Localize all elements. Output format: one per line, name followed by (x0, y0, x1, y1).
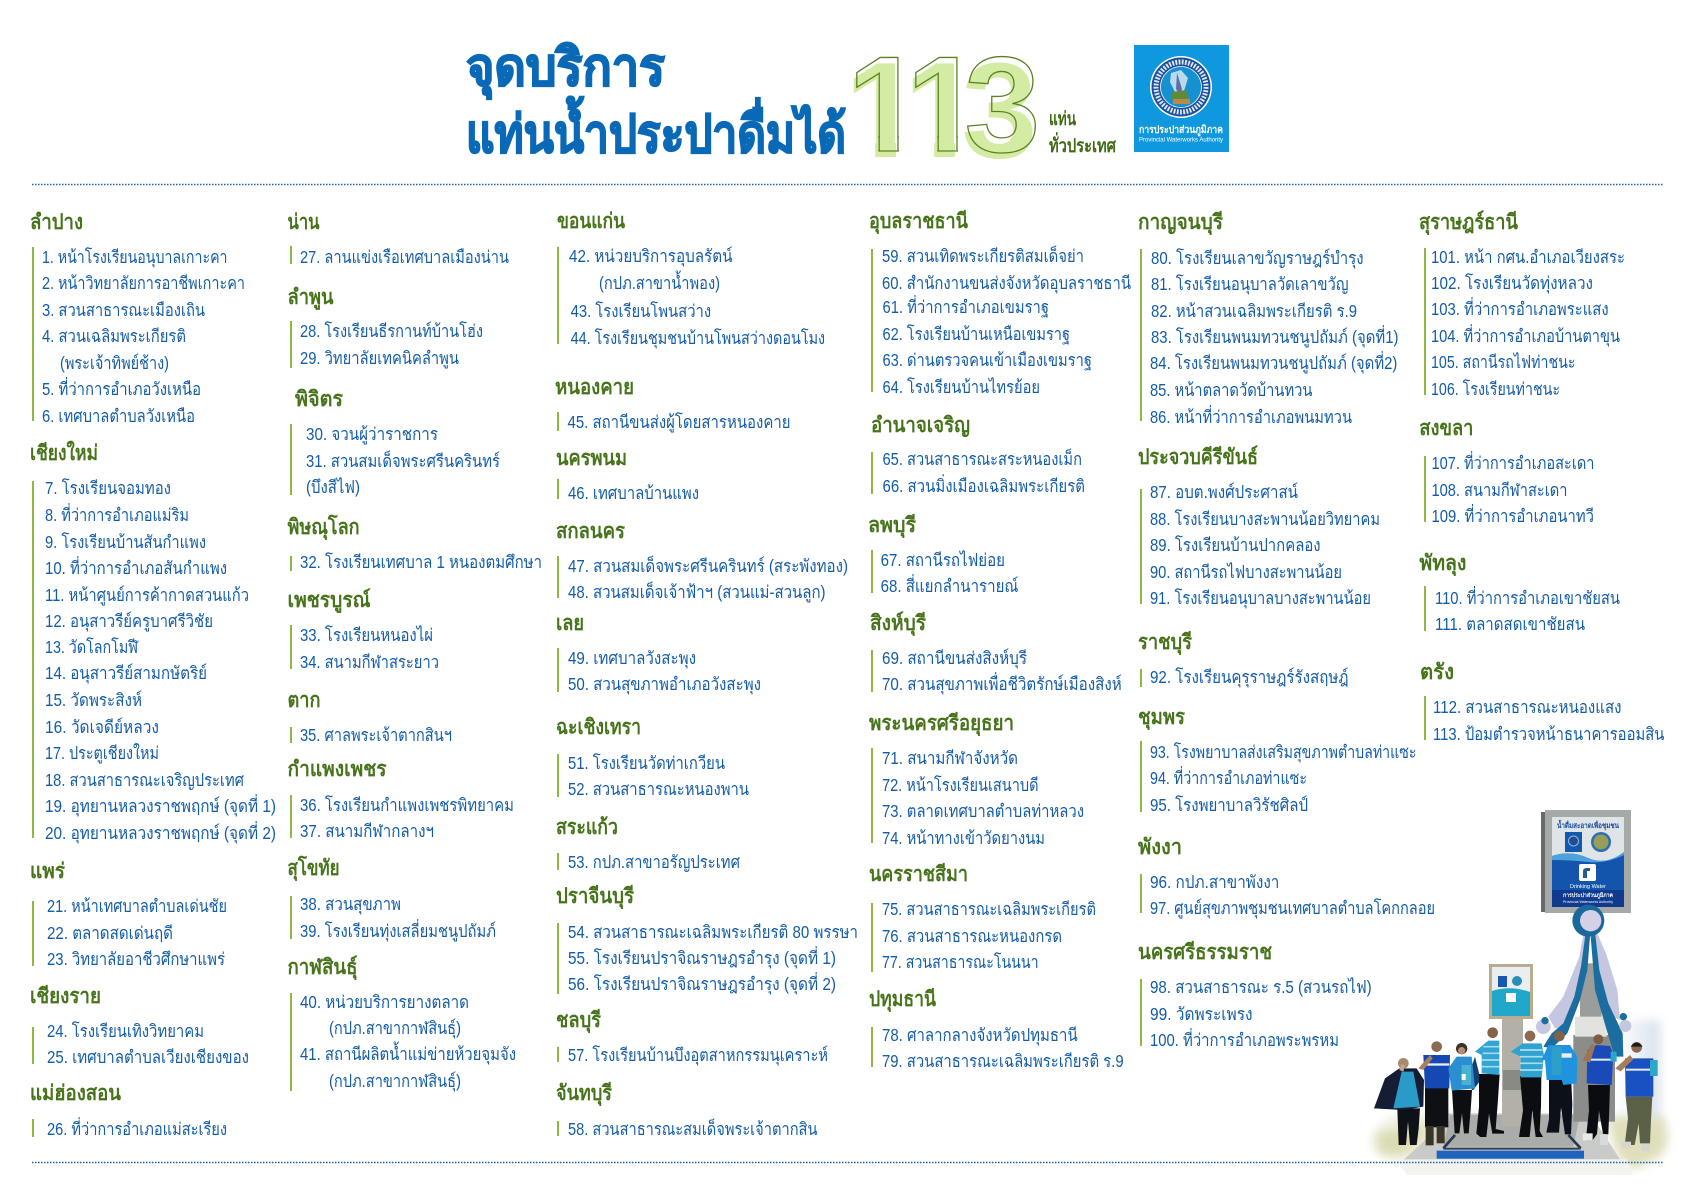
panel: สระแก้ว (556, 815, 740, 872)
list: กาญจนบุรี: 86. หน้าที่ว่าการอำเภอพนมทวน (1150, 405, 1352, 427)
heading: แพร่: แพร่ (30, 860, 66, 883)
list: แพร่ (47, 896, 227, 969)
list: ลำปาง: 2. หน้าวิทยาลัยการอาชีพเกาะคา (42, 273, 245, 293)
list: ประจวบคีรีขันธ์: 88. โรงเรียนบางสะพานน้อยวิทยาคม (1150, 509, 1380, 529)
list: แพร่: 22. ตลาดสดเด่นฤดี (47, 923, 173, 943)
panel: พระนครศรีอยุธยา (869, 711, 1084, 848)
panel: กาฬสินธุ์ (288, 955, 516, 1092)
person 2 (1418, 1041, 1450, 1145)
list: ขอนแก่น: 42. หน่วยบริการอุบลรัตน์ (569, 246, 733, 267)
heading: พิษณุโลก: พิษณุโลก (288, 514, 360, 541)
panel: หนองคาย (555, 376, 790, 433)
heading: ตาก: ตาก (288, 689, 320, 712)
list: ลำพูน: 29. วิทยาลัยเทคนิคลำพูน (300, 348, 459, 369)
list: อุบลราชธานี (882, 245, 1131, 397)
panel: ราชบุรี (1138, 630, 1348, 688)
list: อุบลราชธานี: 63. ด่านตรวจคนเข้าเมืองเขมราฐ (882, 350, 1092, 371)
list: นครราชสีมา (882, 899, 1096, 972)
list: กำแพงเพชร (300, 795, 514, 841)
list: สุราษฎร์ธานี: 101. หน้า กศน.อำเภอเวียงสระ (1431, 247, 1625, 267)
panel: พังงา (1138, 836, 1435, 919)
list: อำนาจเจริญ: 65. สวนสาธารณะสระหนองเม็ก (882, 448, 1082, 469)
list: ปทุมธานี: 79. สวนสาธารณะเฉลิมพระเกียรติ ร.9 (882, 1051, 1124, 1071)
list: กาญจนบุรี: 85. หน้าตลาดวัดบ้านทวน (1150, 380, 1313, 400)
heading: ชุมพร: ชุมพร (1138, 706, 1186, 731)
heading: เพชรบูรณ์: เพชรบูรณ์ (288, 588, 371, 614)
panel: ประจวบคีรีขันธ์ (1138, 445, 1380, 609)
list: อุบลราชธานี: 59. สวนเทิดพระเกียรติสมเด็จย่า (882, 245, 1084, 266)
heading: พระนครศรีอยุธยา: พระนครศรีอยุธยา (869, 711, 1014, 737)
list: ปราจีนบุรี: 56. โรงเรียนปราจิณราษฎรอำรุง (จุดที่ 2) (568, 972, 836, 995)
list: ลำปาง: (พระเจ้าทิพย์ช้าง) (60, 353, 169, 373)
logo: Provincial Waterworks Authority: การประปาส่วนภูมิภาค (1139, 124, 1223, 137)
list: นครราชสีมา: 75. สวนสาธารณะเฉลิมพระเกียรติ (882, 899, 1096, 919)
list: กำแพงเพชร: 36. โรงเรียนกำแพงเพชรพิทยาคม (300, 795, 514, 815)
list: กำแพงเพชร: 37. สนามกีฬากลางฯ (300, 821, 434, 841)
heading: เลย: เลย (556, 612, 584, 635)
list: หนองคาย: 45. สถานีขนส่งผู้โดยสารหนองคาย (568, 412, 790, 433)
list: พระนครศรีอยุธยา: 72. หน้าโรงเรียนเสนาบดี (882, 775, 1039, 795)
drape, rosette and dispenser cabinet (1536, 905, 1631, 1122)
list: อุบลราชธานี: 60. สำนักงานขนส่งจังหวัดอุบลราชธานี (882, 273, 1131, 294)
panel: ตรัง (1420, 661, 1664, 744)
list: สุราษฎร์ธานี: 104. ที่ว่าการอำเภอบ้านตาขุน (1431, 324, 1620, 347)
subtitle: units nationwide (1049, 109, 1117, 157)
list: ลำพูน (300, 321, 483, 369)
list: เพชรบูรณ์: 34. สนามกีฬาสระยาว (300, 652, 439, 672)
list: ลพบุรี: 68. สี่แยกลำนารายณ์ (881, 574, 1018, 596)
list: กาญจนบุรี: 81. โรงเรียนอนุบาลวัดเลาขวัญ (1151, 274, 1348, 295)
list: สุราษฎร์ธานี: 105. สถานีรถไฟท่าชนะ (1431, 352, 1576, 372)
list: เชียงใหม่: 10. ที่ว่าการอำเภอสันกำแพง (45, 556, 227, 578)
heading: หนองคาย: หนองคาย (555, 376, 634, 399)
list: เลย (568, 648, 761, 695)
panel: กำแพงเพชร (288, 758, 514, 841)
list: พิษณุโลก: 32. โรงเรียนเทศบาล 1 หนองตมศึกษา (300, 552, 542, 572)
heading: จันทบุรี: จันทบุรี (556, 1081, 613, 1107)
panel: จันทบุรี (556, 1081, 818, 1139)
heading: กาฬสินธุ์: กาฬสินธุ์ (288, 955, 358, 981)
list: กาฬสินธุ์: (กปภ.สาขากาฬสินธุ์) (329, 1018, 461, 1039)
list: พัทลุง: 111. ตลาดสดเขาชัยสน (1435, 614, 1585, 634)
panel: กาญจนบุรี (1138, 210, 1398, 427)
list: สุโขทัย: 39. โรงเรียนทุ่งเสลี่ยมชนูปถัมภ์ (300, 919, 496, 942)
list: ราชบุรี: 92. โรงเรียนคุรุราษฎร์รังสฤษฎ์ (1150, 667, 1348, 688)
panel: เพชรบูรณ์ (288, 588, 439, 672)
panel: สกลนคร (556, 520, 848, 603)
list: ลำปาง: 5. ที่ว่าการอำเภอวังเหนือ (42, 377, 201, 399)
list: ชลบุรี: 57. โรงเรียนบ้านบึงอุตสาหกรรมนุเคราะห์ (568, 1045, 828, 1066)
list: ลำปาง: 6. เทศบาลตำบลวังเหนือ (42, 406, 195, 426)
list: เชียงใหม่ (45, 478, 276, 844)
heading: กาญจนบุรี: กาญจนบุรี (1138, 210, 1224, 236)
list: สระแก้ว: 53. กปภ.สาขาอรัญประเทศ (568, 852, 740, 872)
list: เพชรบูรณ์ (300, 625, 439, 672)
heading: ขอนแก่น: ขอนแก่น (557, 210, 626, 233)
list: ตาก: 35. ศาลพระเจ้าตากสินฯ (300, 725, 452, 745)
heading: สระแก้ว: สระแก้ว (556, 815, 618, 839)
big sign panel: การประปาส่วนภูมิภาค (1563, 891, 1613, 900)
panel: นครศรีธรรมราช (1138, 940, 1372, 1050)
list: นครราชสีมา: 77. สวนสาธารณะโนนนา (882, 952, 1039, 972)
list: สุราษฎร์ธานี (1431, 247, 1625, 399)
list: ชุมพร (1150, 742, 1416, 815)
panel: พิจิตร (290, 388, 500, 497)
list: นครศรีธรรมราช: 99. วัดพระเพรง (1150, 1004, 1253, 1024)
list: อุบลราชธานี: 62. โรงเรียนบ้านเหนือเขมราฐ (882, 324, 1070, 345)
heading: สุโขทัย: สุโขทัย (288, 855, 340, 882)
heading: สิงห์บุรี: สิงห์บุรี (870, 611, 927, 637)
list: ชุมพร: 93. โรงพยาบาลส่งเสริมสุขภาพตำบลท่าแซะ (1150, 742, 1416, 763)
person 6 (1542, 1031, 1577, 1134)
list: กาญจนบุรี: 82. หน้าสวนเฉลิมพระเกียรติ ร.9 (1151, 301, 1357, 321)
heading: อุบลราชธานี: อุบลราชธานี (869, 209, 969, 235)
list: ลำปาง: 1. หน้าโรงเรียนอนุบาลเกาะคา (42, 247, 228, 268)
list: เชียงใหม่: 12. อนุสาวรีย์ครูบาศรีวิชัย (45, 611, 213, 632)
small sign and post (1489, 964, 1533, 1126)
person 8 (1615, 1042, 1658, 1151)
title: แท่นน้ำประปาดื่มได้ (466, 96, 846, 164)
list: สงขลา: 109. ที่ว่าการอำเภอนาทวี (1432, 504, 1594, 526)
panel: ขอนแก่น (557, 210, 825, 349)
list: สุโขทัย (300, 894, 496, 942)
panel: สุโขทัย (288, 855, 496, 942)
photo: officials drinking at water station (1370, 810, 1668, 1175)
photo background and ground (1370, 1020, 1668, 1175)
list: ปทุมธานี (882, 1025, 1124, 1071)
list: ชุมพร: 94. ที่ว่าการอำเภอท่าแซะ (1150, 766, 1307, 788)
list: สงขลา: 108. สนามกีฬาสะเดา (1432, 480, 1568, 500)
list: กาฬสินธุ์: 41. สถานีผลิตน้ำแม่ข่ายห้วยจุมจัง (300, 1041, 516, 1065)
list: เชียงราย: 24. โรงเรียนเทิงวิทยาคม (47, 1021, 204, 1041)
list: พิจิตร: 31. สวนสมเด็จพระศรีนครินทร์ (306, 450, 500, 471)
person 5 (1511, 1031, 1544, 1137)
list: ลำปาง: 4. สวนเฉลิมพระเกียรติ (42, 326, 186, 346)
panel: น่าน (288, 211, 509, 267)
list: เชียงใหม่: 13. วัดโลกโมฬี (45, 637, 139, 657)
list: พัทลุง (1435, 586, 1620, 634)
big number 113: 1 (906, 28, 982, 180)
list: พังงา: 96. กปภ.สาขาพังงา (1150, 872, 1279, 892)
list: สกลนคร: 48. สวนสมเด็จเจ้าฟ้าฯ (สวนแม่-สวนลูก) (568, 581, 826, 603)
list: ฉะเชิงเทรา (568, 753, 749, 799)
list: สิงห์บุรี: 70. สวนสุขภาพเพื่อชีวิตรักษ์เมืองสิงห์ (882, 672, 1122, 695)
title: จุดบริการ (466, 39, 665, 100)
list: กาฬสินธุ์: 40. หน่วยบริการยางตลาด (300, 992, 469, 1012)
panel: นครพนม (556, 447, 699, 503)
big number 113: 1 (844, 34, 920, 186)
heading: เชียงใหม่: เชียงใหม่ (30, 440, 98, 465)
title (466, 39, 846, 164)
panel: แม่ฮ่องสอน (30, 1082, 227, 1139)
list: เชียงราย: 25. เทศบาลตำบลเวียงเชียงของ (47, 1047, 249, 1067)
list: นครศรีธรรมราช: 100. ที่ว่าการอำเภอพระพรหม (1150, 1028, 1339, 1050)
heading: สงขลา: สงขลา (1419, 417, 1473, 440)
panel: สุราษฎร์ธานี (1419, 210, 1625, 399)
list: แพร่: 21. หน้าเทศบาลตำบลเด่นชัย (47, 896, 227, 916)
heading: นครพนม: นครพนม (556, 447, 627, 470)
panel: ลพบุรี (868, 513, 1018, 596)
list: เชียงราย (47, 1021, 249, 1067)
heading: ลำพูน: ลำพูน (288, 286, 334, 311)
big sign panel: น้ำดื่มสะอาดเพื่อชุมชน (1557, 819, 1620, 830)
big sign panel (1541, 810, 1631, 913)
heading: น่าน: น่าน (288, 211, 320, 234)
list: พระนครศรีอยุธยา: 74. หน้าทางเข้าวัดยางนม (882, 828, 1045, 848)
list: ประจวบคีรีขันธ์: 91. โรงเรียนอนุบาลบางสะพานน้อย (1150, 588, 1371, 609)
panel: พัทลุง (1419, 552, 1620, 634)
panel: สิงห์บุรี (870, 611, 1122, 695)
list: ลำปาง: 3. สวนสาธารณะเมืองเถิน (42, 300, 205, 320)
list: กาญจนบุรี: 84. โรงเรียนพนมทวนชนูปถัมภ์ (จุดที่2) (1150, 351, 1397, 374)
list: พิจิตร (306, 424, 500, 497)
big number 113 (854, 56, 1036, 159)
list: สกลนคร (568, 555, 848, 603)
list: เชียงใหม่: 18. สวนสาธารณะเจริญประเทศ (45, 770, 244, 790)
heading: พังงา: พังงา (1138, 836, 1182, 859)
panel: ตาก (288, 689, 452, 745)
big sign panel: Drinking Water (1570, 884, 1606, 890)
list: สงขลา: 107. ที่ว่าการอำเภอสะเดา (1432, 451, 1594, 473)
list: สิงห์บุรี (882, 648, 1122, 695)
list: กาฬสินธุ์ (300, 992, 516, 1092)
heading: นครราชสีมา: นครราชสีมา (869, 862, 968, 886)
panel: ปราจีนบุรี (556, 884, 858, 995)
list: อุบลราชธานี: 61. ที่ว่าการอำเภอเขมราฐ (882, 295, 1049, 318)
list: พัทลุง: 110. ที่ว่าการอำเภอเขาชัยสน (1435, 586, 1620, 608)
list: ขอนแก่น (569, 246, 825, 349)
panel: ชุมพร (1138, 706, 1416, 815)
list: นครราชสีมา: 76. สวนสาธารณะหนองกรด (882, 926, 1062, 946)
list: สุราษฎร์ธานี: 102. โรงเรียนวัดทุ่งหลวง (1431, 273, 1593, 294)
list: ตรัง: 112. สวนสาธารณะหนองแสง (1433, 697, 1622, 717)
list: ประจวบคีรีขันธ์: 89. โรงเรียนบ้านปากคลอง (1150, 535, 1321, 555)
person 7 (1583, 1034, 1617, 1145)
list: ปราจีนบุรี (568, 922, 858, 995)
list: นครศรีธรรมราช: 98. สวนสาธารณะ ร.5 (สวนรถไฟ) (1150, 977, 1372, 997)
list: ประจวบคีรีขันธ์: 90. สถานีรถไฟบางสะพานน้อย (1150, 562, 1342, 582)
list: กาญจนบุรี: 83. โรงเรียนพนมทวนชนูปถัมภ์ (จุดที่1) (1151, 325, 1398, 348)
heading: ราชบุรี: ราชบุรี (1138, 630, 1193, 656)
panel: สงขลา (1419, 417, 1594, 526)
panel: ชลบุรี (556, 1008, 828, 1066)
heading: กำแพงเพชร: กำแพงเพชร (288, 758, 387, 781)
subtitle: units nationwide: ทั่วประเทศ (1049, 132, 1117, 157)
heading: นครศรีธรรมราช: นครศรีธรรมราช (1138, 940, 1272, 964)
list: นครพนม: 46. เทศบาลบ้านแพง (568, 483, 699, 503)
panel: ลำปาง (30, 211, 245, 426)
list: อุบลราชธานี: 64. โรงเรียนบ้านไทรย้อย (882, 377, 1040, 397)
list: ปราจีนบุรี: 55. โรงเรียนปราจิณราษฎรอำรุง (จุดที่ 1) (568, 946, 836, 969)
subtitle: units nationwide: แท่น (1049, 109, 1076, 130)
list: ฉะเชิงเทรา: 51. โรงเรียนวัดท่าเกวียน (568, 753, 725, 773)
list: ลพบุรี: 67. สถานีรถไฟย่อย (881, 550, 1005, 570)
heading: พิจิตร: พิจิตร (295, 388, 344, 411)
list: กาฬสินธุ์: (กปภ.สาขากาฬสินธุ์) (329, 1071, 461, 1092)
list: ปทุมธานี: 78. ศาลากลางจังหวัดปทุมธานี (882, 1025, 1078, 1046)
logo: Provincial Waterworks Authority: Provincial Waterworks Authority (1139, 136, 1224, 144)
list: พระนครศรีอยุธยา (882, 748, 1084, 848)
list: ขอนแก่น: 43. โรงเรียนโพนสว่าง (571, 301, 711, 321)
heading: อำนาจเจริญ: อำนาจเจริญ (871, 414, 970, 438)
list: เชียงใหม่: 17. ประตูเชียงใหม่ (45, 743, 159, 764)
panel: นครราชสีมา (869, 862, 1096, 972)
big number 113: 3 (965, 28, 1040, 180)
big number 113: 3 (962, 34, 1037, 186)
list: เชียงใหม่: 19. อุทยานหลวงราชพฤกษ์ (จุดที่ 1) (45, 794, 276, 817)
list: สุราษฎร์ธานี: 103. ที่ว่าการอำเภอพระแสง (1431, 297, 1609, 319)
list: พิจิตร: 30. จวนผู้ว่าราชการ (306, 424, 438, 445)
list: เชียงใหม่: 7. โรงเรียนจอมทอง (45, 478, 171, 498)
list: อำนาจเจริญ (882, 448, 1085, 496)
heading: ชลบุรี: ชลบุรี (556, 1008, 602, 1034)
heading: พัทลุง: พัทลุง (1419, 552, 1466, 577)
list: กาญจนบุรี (1150, 248, 1398, 427)
list: สุราษฎร์ธานี: 106. โรงเรียนท่าชนะ (1431, 379, 1560, 399)
list: ลพบุรี (881, 550, 1018, 596)
big number 113: 1 (904, 34, 979, 186)
list: สิงห์บุรี: 69. สถานีขนส่งสิงห์บุรี (882, 648, 1027, 669)
heading: ประจวบคีรีขันธ์: ประจวบคีรีขันธ์ (1138, 445, 1258, 469)
list: ขอนแก่น: 44. โรงเรียนชุมชนบ้านโพนสว่างดอนโมง (571, 328, 825, 349)
heading: ปทุมธานี: ปทุมธานี (869, 987, 937, 1013)
list: พังงา (1150, 872, 1435, 919)
heading: เชียงราย: เชียงราย (30, 984, 101, 1008)
list: อำนาจเจริญ: 66. สวนมิ่งเมืองเฉลิมพระเกียรติ (882, 474, 1085, 496)
heading: ตรัง: ตรัง (1420, 661, 1454, 684)
panel: ลำพูน (288, 286, 483, 369)
heading: ลำปาง: ลำปาง (30, 211, 83, 234)
list: เลย: 49. เทศบาลวังสะพุง (568, 648, 696, 669)
list: สงขลา (1432, 451, 1594, 526)
panel: ปทุมธานี (869, 987, 1124, 1071)
big sign panel: Provincial Waterworks Authority (1563, 899, 1613, 904)
list: เพชรบูรณ์: 33. โรงเรียนหนองไผ่ (300, 625, 433, 645)
list: กาญจนบุรี: 80. โรงเรียนเลาขวัญราษฎร์บำรุง (1151, 248, 1364, 269)
list: ฉะเชิงเทรา: 52. สวนสาธารณะหนองพาน (568, 779, 749, 799)
list: เลย: 50. สวนสุขภาพอำเภอวังสะพุง (568, 674, 761, 695)
heading: สกลนคร: สกลนคร (556, 520, 626, 543)
list: ลำพูน: 28. โรงเรียนธีรกานท์บ้านโฮ่ง (300, 321, 483, 341)
list: แม่ฮ่องสอน: 26. ที่ว่าการอำเภอแม่สะเรียง (47, 1117, 227, 1139)
list: เชียงใหม่: 8. ที่ว่าการอำเภอแม่ริม (45, 503, 189, 525)
person 1 (1374, 1058, 1424, 1145)
panel: อำนาจเจริญ (871, 414, 1085, 496)
person 4 (1475, 1027, 1504, 1137)
list: นครศรีธรรมราช (1150, 977, 1372, 1050)
heading: ฉะเชิงเทรา: ฉะเชิงเทรา (556, 716, 641, 739)
panel: เชียงใหม่ (30, 440, 276, 844)
heading: สุราษฎร์ธานี: สุราษฎร์ธานี (1419, 210, 1519, 236)
list: เชียงใหม่: 14. อนุสาวรีย์สามกษัตริย์ (45, 663, 207, 684)
list: ตรัง (1433, 697, 1664, 744)
list: ลำปาง (42, 247, 245, 426)
panel: แพร่ (30, 860, 227, 969)
panel: อุบลราชธานี (869, 209, 1131, 397)
heading: ลพบุรี: ลพบุรี (868, 513, 917, 539)
list: เชียงใหม่: 15. วัดพระสิงห์ (45, 690, 142, 710)
list: พระนครศรีอยุธยา: 73. ตลาดเทศบาลตำบลท่าหลวง (882, 801, 1084, 821)
list: จันทบุรี: 58. สวนสาธารณะสมเด็จพระเจ้าตากสิน (568, 1118, 818, 1139)
panel: เลย (556, 612, 761, 695)
panel: ฉะเชิงเทรา (556, 716, 749, 799)
person 3 (1448, 1043, 1481, 1133)
list: พระนครศรีอยุธยา: 71. สนามกีฬาจังหวัด (882, 748, 1018, 768)
list: เชียงใหม่: 16. วัดเจดีย์หลวง (45, 717, 159, 737)
list: เชียงใหม่: 20. อุทยานหลวงราชพฤกษ์ (จุดที่ 2) (45, 821, 276, 844)
people group (1374, 1027, 1658, 1151)
list: แพร่: 23. วิทยาลัยอาชีวศึกษาแพร่ (47, 949, 225, 969)
list: น่าน: 27. ลานแข่งเรือเทศบาลเมืองน่าน (300, 247, 509, 267)
heading: ปราจีนบุรี: ปราจีนบุรี (556, 884, 635, 910)
logo: Provincial Waterworks Authority (1134, 45, 1229, 152)
list: ปราจีนบุรี: 54. สวนสาธารณะเฉลิมพระเกียรติ 80 พรรษา (568, 922, 858, 942)
panel: เชียงราย (30, 984, 249, 1067)
list: ชุมพร: 95. โรงพยาบาลวิรัชศิลป์ (1150, 795, 1308, 815)
panel: พิษณุโลก (288, 514, 542, 572)
list: สุโขทัย: 38. สวนสุขภาพ (300, 894, 401, 915)
list: ประจวบคีรีขันธ์ (1150, 482, 1380, 609)
list: ประจวบคีรีขันธ์: 87. อบต.พงศ์ประศาสน์ (1150, 482, 1298, 502)
big number 113: 1 (848, 28, 923, 180)
list: เชียงใหม่: 11. หน้าศูนย์การค้ากาดสวนแก้ว (45, 585, 249, 606)
list: พิจิตร: (บึงสีไฟ) (306, 477, 360, 497)
list: ขอนแก่น: (กปภ.สาขาน้ำพอง) (599, 270, 720, 293)
list: พังงา: 97. ศูนย์สุขภาพชุมชนเทศบาลตำบลโคกกลอย (1150, 898, 1435, 919)
list: สกลนคร: 47. สวนสมเด็จพระศรีนครินทร์ (สระพังทอง) (568, 555, 848, 576)
list: เชียงใหม่: 9. โรงเรียนบ้านสันกำแพง (45, 532, 206, 552)
heading: แม่ฮ่องสอน: แม่ฮ่องสอน (30, 1082, 122, 1105)
